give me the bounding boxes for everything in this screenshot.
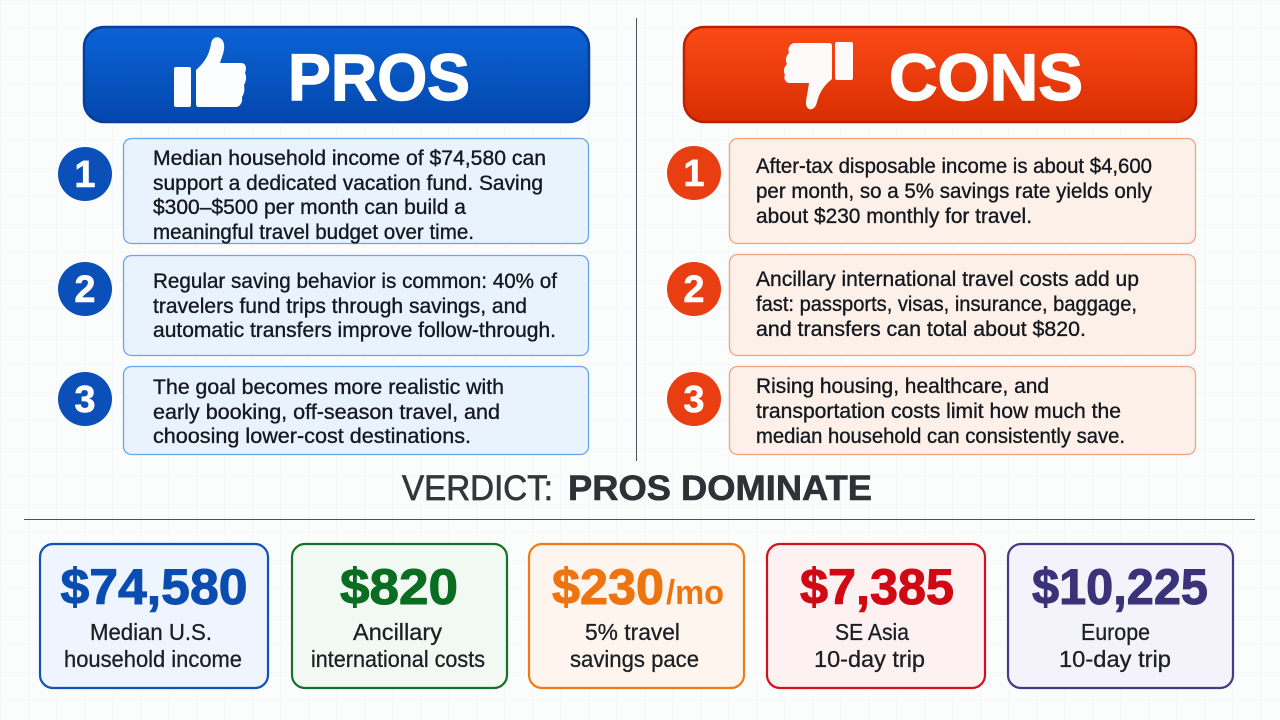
- stat: ancillary costs: [292, 544, 507, 688]
- stat: Europe trip: Europe: [1081, 619, 1150, 645]
- stat: SE Asia trip: $7,385: [800, 559, 954, 615]
- stat: SE Asia trip: 10-day trip: [814, 646, 925, 672]
- stat: Europe trip: [1008, 544, 1233, 688]
- con item 2: and transfers can total about $820.: [756, 318, 1086, 341]
- pro item 1: 1: [74, 154, 96, 196]
- panel: pros: [58, 27, 589, 454]
- stat: ancillary costs: Ancillary: [353, 619, 443, 645]
- icon: thumbs up: [174, 37, 246, 107]
- pro item 3: 3: [74, 379, 96, 421]
- stat: SE Asia trip: [767, 544, 985, 688]
- pro item 3: choosing lower-cost destinations.: [153, 425, 471, 448]
- stat: median income: Median U.S.: [90, 619, 212, 645]
- pros heading: PROS: [288, 40, 470, 114]
- stat: Europe trip: $10,225: [1032, 559, 1208, 615]
- stat: SE Asia trip: SE Asia: [835, 619, 909, 645]
- con item 2: [667, 254, 1196, 356]
- pro item 2: Regular saving behavior is common: 40% of: [153, 270, 557, 293]
- con item 3: median household can consistently save.: [756, 425, 1125, 448]
- pro item 3: early booking, off-season travel, and: [153, 401, 500, 424]
- pro item 3: [58, 366, 588, 454]
- icon: thumbs down: [784, 42, 853, 109]
- pro item 1: support a dedicated vacation fund. Saving: [153, 172, 543, 195]
- verdict: VERDICT:: [402, 469, 553, 508]
- con item 1: After-tax disposable income is about $4,600: [756, 155, 1152, 178]
- con item 3: 3: [683, 379, 705, 421]
- pro item 1: $300–$500 per month can build a: [153, 196, 466, 219]
- con item 2: fast: passports, visas, insurance, baggage,: [756, 293, 1137, 316]
- con item 3: transportation costs limit how much the: [756, 400, 1121, 423]
- con item 2: Ancillary international travel costs add up: [756, 268, 1139, 291]
- stat: savings pace: [529, 544, 744, 688]
- stat: ancillary costs: $820: [340, 559, 458, 615]
- con item 3: [667, 366, 1196, 454]
- stat: median income: $74,580: [60, 559, 248, 615]
- stat: median income: [40, 544, 268, 688]
- cons header banner: [684, 27, 1196, 122]
- con item 1: about $230 monthly for travel.: [756, 205, 1032, 228]
- pro item 1: meaningful travel budget over time.: [153, 221, 474, 244]
- verdict: PROS DOMINATE: [568, 469, 872, 508]
- cons heading: CONS: [889, 40, 1083, 114]
- panel: key figures: [40, 544, 1233, 688]
- con item 1: per month, so a 5% savings rate yields only: [756, 180, 1152, 203]
- con item 3: Rising housing, healthcare, and: [756, 375, 1049, 398]
- con item 1: [667, 138, 1196, 244]
- stat: savings pace: $230: [552, 559, 664, 615]
- stat: Europe trip: 10-day trip: [1059, 646, 1171, 672]
- pro item 1: [58, 138, 588, 244]
- verdict: [402, 469, 872, 508]
- stat: savings pace: /mo: [666, 574, 724, 612]
- stat: median income: household income: [64, 646, 242, 672]
- stat: savings pace: 5% travel: [585, 619, 680, 645]
- pro item 3: The goal becomes more realistic with: [153, 376, 504, 399]
- stat: savings pace: savings pace: [570, 646, 699, 672]
- pro item 1: Median household income of $74,580 can: [153, 147, 546, 170]
- pro item 2: travelers fund trips through savings, and: [153, 295, 527, 318]
- pros header banner: [84, 27, 589, 122]
- pro item 2: 2: [74, 269, 96, 311]
- pro item 2: automatic transfers improve follow-through.: [153, 319, 556, 342]
- pro item 2: [58, 256, 588, 356]
- stat: ancillary costs: international costs: [311, 646, 485, 672]
- con item 1: 1: [683, 153, 705, 195]
- panel: cons: [667, 27, 1196, 454]
- con item 2: 2: [683, 269, 705, 311]
